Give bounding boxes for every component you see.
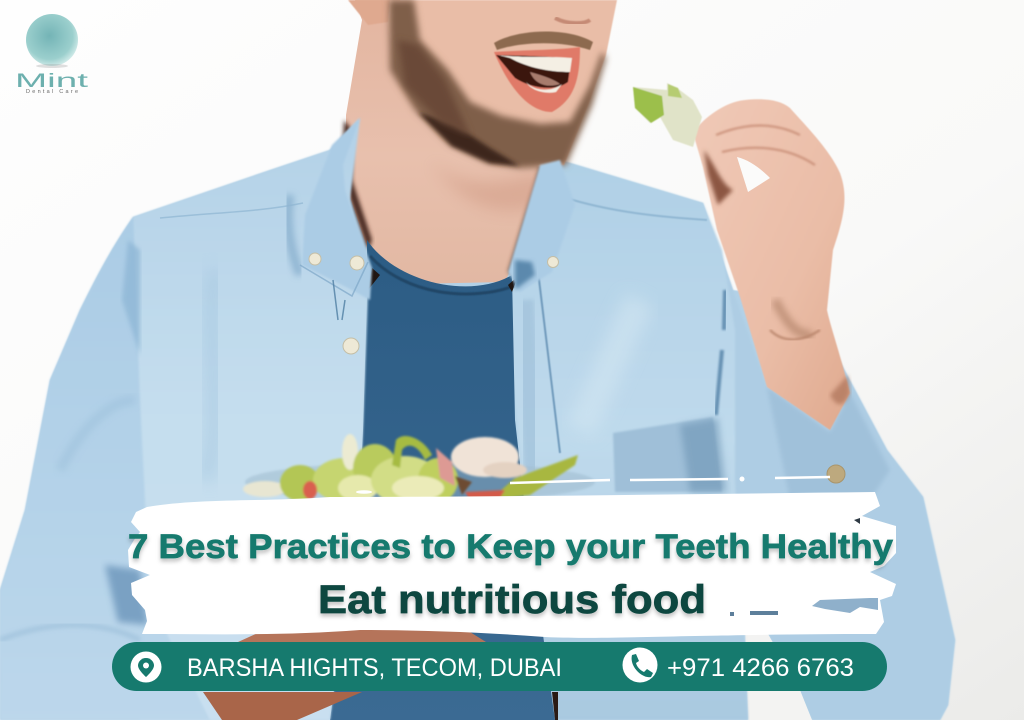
- slit beside tee: [552, 692, 558, 720]
- face: [384, 0, 617, 168]
- hand: [693, 99, 850, 430]
- shirt patches showing through banner: [812, 598, 878, 613]
- shirt buttons: [309, 253, 845, 483]
- neck shadow: [342, 120, 372, 250]
- right fold lines: [716, 290, 725, 415]
- brush stroke banner: [128, 476, 896, 638]
- shirt shadow folds: [122, 240, 140, 355]
- torso left: [133, 118, 368, 720]
- ear: [348, 0, 390, 25]
- torso right: [505, 160, 748, 720]
- title: 7 Best Practices to Keep your Teeth Healthy: [128, 528, 893, 566]
- icon: location pin: [130, 652, 162, 682]
- address: BARSHA HIGHTS, TECOM, DUBAI: [187, 654, 562, 682]
- logo sphere: [26, 14, 78, 66]
- pocket: [613, 417, 722, 492]
- icon: phone: [622, 648, 658, 682]
- subtitle: Eat nutritious food: [318, 578, 706, 622]
- phone number: +971 4266 6763: [667, 654, 854, 682]
- sleeve cuff: [767, 387, 890, 500]
- collar left: [302, 118, 372, 300]
- hand shading: [704, 150, 733, 205]
- shirt base silhouette: [0, 118, 955, 720]
- t-shirt: [330, 240, 555, 720]
- mouth: [494, 47, 580, 112]
- beard: [389, 0, 606, 168]
- gap between shirt and sleeve: [748, 634, 812, 720]
- sleeve right (raised arm): [715, 240, 955, 720]
- neck: [346, 0, 548, 284]
- plate: [245, 462, 595, 502]
- salad: [243, 434, 578, 504]
- logo tagline: Dental Care: [26, 89, 78, 95]
- logo: Mint Dental Care: [15, 14, 89, 95]
- forearm under plate: [203, 627, 486, 720]
- contact bar: [112, 642, 887, 691]
- collar right: [508, 160, 575, 292]
- brush flecks: [510, 477, 830, 483]
- gap between thumb and finger: [737, 157, 770, 192]
- nose shadow: [555, 18, 590, 23]
- logo wordmark: Mint: [15, 71, 89, 92]
- sleeve left: [0, 217, 210, 720]
- lettuce piece: [633, 83, 702, 147]
